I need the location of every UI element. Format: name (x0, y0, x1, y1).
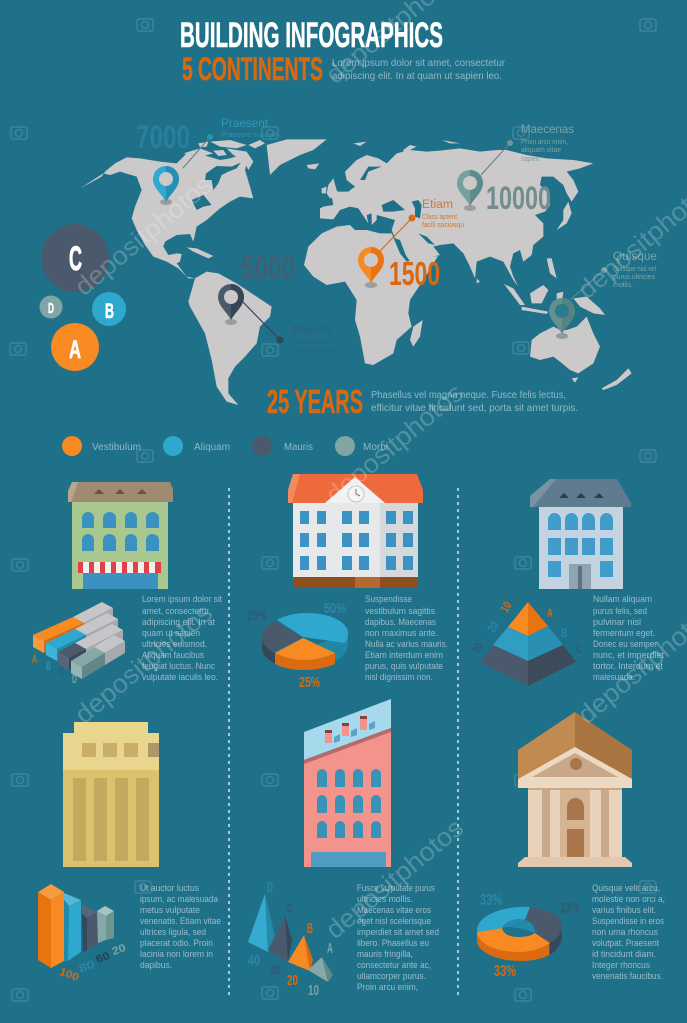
text: panel 5: Proin arcu enim, (357, 982, 418, 993)
text: panel 5: libero. Phasellus eu (357, 938, 429, 949)
text: panel 2: Nulla ac varius mauris. (365, 639, 448, 650)
bubble chart A B C D: B (105, 300, 114, 323)
25 years text: efficitur vitae tincidunt sed, porta sit amet turpis. (371, 402, 578, 414)
text: panel 6: non urna rhoncus (592, 927, 658, 938)
chart: 3D bars: 20 (110, 942, 128, 958)
text: panel 1: adipiscing elit. In at (142, 617, 215, 628)
text: panel 2: Etiam interdum enim (365, 650, 443, 661)
chart: pie: 25% (247, 607, 267, 624)
pin: 7000: Praesent suscipit (221, 132, 278, 139)
pin: 5000: sapien. (293, 356, 313, 363)
text: panel 6: venenatis faucibus. (592, 971, 663, 982)
intro text: Lorem ipsum dolor sit amet, consectetur (332, 57, 505, 69)
text: panel 1: Aliquam faucibus (142, 650, 204, 661)
chart: pyramid (468, 599, 582, 686)
chart: donut: 33% (494, 963, 516, 980)
text: panel 4: ipsum, ac malesuada (140, 894, 219, 905)
chart: triangles: D (267, 879, 273, 896)
text: panel 3: purus felis, sed (593, 606, 647, 617)
pin: 7000: Praesent (221, 116, 269, 130)
pin: Quisque: purus ultricies (613, 274, 655, 281)
legend: Aliquam (194, 442, 230, 453)
world map (80, 139, 632, 405)
25 years text: Phasellus vel magna neque. Fusce felis lectus, (371, 389, 566, 401)
chart: isometric bars: B (46, 659, 51, 673)
chart: isometric bars: C (59, 665, 64, 679)
text: panel 4 (140, 883, 221, 971)
text: panel 5: ultricies mollis. (357, 894, 413, 905)
text: panel 3: tortor. Interdum et (593, 661, 663, 672)
legend: Morbi (363, 442, 388, 453)
text: panel 4: dapibus. (140, 960, 172, 971)
building: blue house (530, 479, 631, 589)
pin: 10000 (457, 122, 574, 216)
text: panel 2: purus, quis vulputate (365, 661, 443, 672)
text: panel 6: Integer rhoncus (592, 960, 650, 971)
pin: 7000 (136, 116, 278, 205)
chart: pie: 25% (299, 674, 320, 691)
text: panel 2: Suspendisse (365, 594, 412, 605)
pin: 1500: facili sociosqu (422, 220, 464, 229)
text: panel 4: venenatis. Etiam vitae (140, 916, 221, 927)
pin: 7000: 7000 (136, 119, 190, 155)
text: panel 5 (357, 883, 439, 993)
building: yellow tower (63, 722, 159, 867)
pin: Quisque: Quisque (613, 251, 657, 263)
text: panel 2: non maximus ante. (365, 628, 438, 639)
pin: 1500: 1500 (389, 255, 440, 292)
text: panel 6: molestie non orci a, (592, 894, 665, 905)
text: panel 6 (592, 883, 665, 982)
bubble chart A B C D (40, 224, 126, 371)
chart: pyramid: A (547, 606, 553, 620)
chart: 3D bars (38, 884, 128, 984)
chart: triangles (248, 879, 333, 999)
chart: pie: 50% (324, 600, 346, 617)
title: BUILDING INFOGRAPHICS (180, 16, 443, 55)
watermark: depositphotos (320, 812, 469, 945)
pin: 10000: sapien. (521, 156, 541, 163)
text: panel 1: vulputate iaculis leo. (142, 672, 218, 683)
text: panel 2: vestibulum sagittis (365, 606, 435, 617)
subtitle: 5 continents: 5 CONTINENTS (182, 51, 323, 87)
pin: Quisque: Quisque nisl vel (613, 266, 656, 273)
text: panel 5: mauris fringilla, (357, 949, 413, 960)
pin: 5000: aliquam vitae sed (293, 348, 337, 355)
building: pink block (304, 699, 391, 867)
text: panel 5: Fusce vulputate purus (357, 883, 435, 894)
text: panel 3: Nullam aliquam (593, 594, 652, 605)
chart: triangles: 20 (287, 972, 298, 989)
building: temple (518, 712, 632, 867)
legend: Mauris (284, 442, 313, 453)
chart: triangles: C (287, 900, 293, 917)
intro text (332, 57, 505, 82)
chart: pyramid: C (576, 642, 582, 656)
pin: 10000: Maecenas (521, 122, 574, 136)
text: panel 6: id tincidunt diam. (592, 949, 656, 960)
pin: 1500: Class aptent (422, 212, 458, 221)
text: panel 4: Ut auctor luctus (140, 883, 199, 894)
text: panel 1: feugiat luctus. Nunc (142, 661, 215, 672)
text: panel 6: Quisque velit arcu, (592, 883, 660, 894)
chart: donut (477, 892, 580, 980)
text: panel 5: ullamcorper purus. (357, 971, 426, 982)
pin: 1500 (358, 199, 464, 292)
text: panel 1: Lorem ipsum dolor sit (142, 594, 222, 605)
bubble chart A B C D: C (69, 240, 82, 278)
chart: 3D bars: 100 (58, 966, 80, 984)
pin: 5000: Mauris (293, 324, 332, 336)
chart: isometric bars (32, 602, 125, 686)
chart: isometric bars: D (72, 672, 77, 686)
intro text: adipiscing elit. In at quam ut sapien leo. (332, 70, 502, 82)
text: panel 4: ultrices ligula, sed (140, 927, 206, 938)
text: panel 2: nisl dignissim non. (365, 672, 433, 683)
pin: 5000 (218, 249, 337, 363)
building: green shop (68, 482, 173, 589)
pin: 5000: 5000 (241, 249, 295, 286)
chart: 3D bars: 60 (94, 950, 112, 966)
text: panel 3: Donec eu semper (593, 639, 657, 650)
text: panel 3: fermentum eget. (593, 628, 655, 639)
pin: 10000: Proin arcu enim, (521, 139, 568, 146)
pin: Quisque (549, 251, 657, 339)
pin: 1500: Etiam (422, 199, 453, 211)
chart: triangles: 10 (308, 982, 319, 999)
chart: pyramid: 10 (497, 599, 515, 615)
text: panel 4: lacinia non lorem in (140, 949, 213, 960)
text: panel 1: ultricies euismod. (142, 639, 207, 650)
chart: triangles: B (307, 920, 313, 937)
text: panel 4: metus vulputate (140, 905, 200, 916)
text: panel 1 (142, 594, 222, 683)
text: panel 5: eget nisl scelerisque (357, 916, 431, 927)
text: panel 6: Suspendisse in eros (592, 916, 664, 927)
text: panel 2 (365, 594, 448, 683)
chart: pie (247, 600, 348, 691)
text: panel 5: imperdiet sit amet sed (357, 927, 439, 938)
pin: 10000: 10000 (486, 180, 551, 216)
building: white school (288, 474, 423, 588)
25 years text (371, 389, 578, 414)
text: panel 3: malesuada. (593, 672, 635, 683)
legend: Vestibulum (92, 442, 141, 453)
watermark: depositphotos (69, 169, 218, 302)
text: panel 3 (593, 594, 664, 683)
chart: pyramid: B (561, 626, 567, 640)
watermark: depositphotos (320, 377, 469, 510)
text: panel 2: dapibus. Maecenas (365, 617, 436, 628)
chart: pyramid: 20 (484, 619, 502, 635)
chart: triangles: 30 (270, 962, 280, 979)
text: panel 6: volutpat. Praesent (592, 938, 659, 949)
chart: donut: 33% (559, 900, 580, 917)
text: panel 6: varius finibus elit. (592, 905, 656, 916)
legend (62, 436, 388, 456)
chart: triangles: 40 (248, 952, 260, 969)
watermark: depositphotos (69, 597, 218, 730)
25 years: 25 YEARS (267, 383, 363, 420)
text: panel 5: consectetur ante ac, (357, 960, 431, 971)
pin: 10000: aliquam vitae (521, 147, 561, 154)
bubble chart A B C D: A (69, 336, 81, 364)
chart: 3D bars: 80 (77, 959, 97, 975)
pin: Quisque: mollis. (613, 282, 633, 289)
text: panel 3: pulvinar nisl (593, 617, 641, 628)
pin: 5000: Proin arcu nec (293, 339, 331, 346)
chart: donut: 33% (480, 892, 502, 909)
chart: pyramid: 30 (468, 640, 486, 656)
text: panel 1: amet, consectetur (142, 606, 209, 617)
chart: isometric bars: A (32, 652, 37, 666)
text: panel 3: nunc, et imperdiet (593, 650, 664, 661)
bubble chart A B C D: D (48, 300, 54, 317)
text: panel 4: placerat odio. Proin (140, 938, 213, 949)
text: panel 5: Maecenas vitae eros (357, 905, 431, 916)
text: panel 1: quam ut sapien (142, 628, 200, 639)
chart: triangles: A (327, 940, 333, 957)
